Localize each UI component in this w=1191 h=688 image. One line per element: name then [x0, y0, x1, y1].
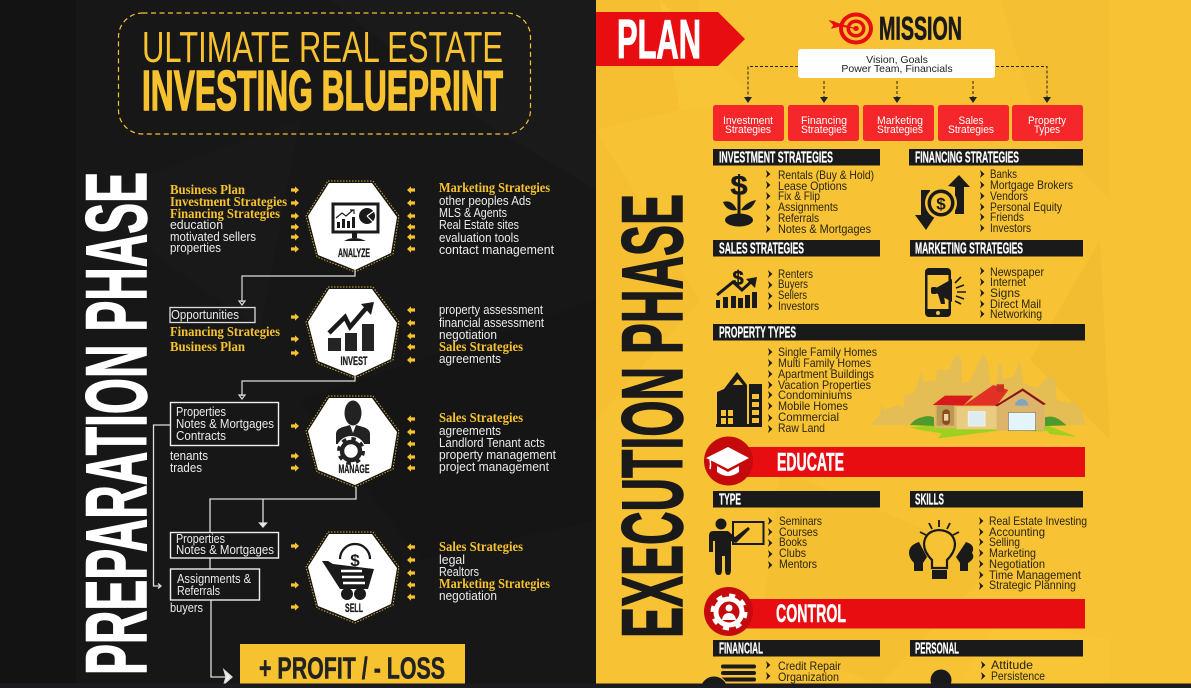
control banner — [704, 587, 1085, 636]
invest inputs left: Financing Strategies — [170, 324, 280, 339]
sell inputs left: buyers — [170, 600, 203, 615]
strategy buttons: Strategies — [877, 124, 923, 136]
panel: marketing strategies — [910, 240, 1083, 321]
sell inputs right: negotiation — [439, 588, 497, 603]
analyze inputs left: education — [170, 217, 223, 232]
panel: financing strategies: Vendors — [990, 189, 1028, 203]
panel: investment strategies: Lease Options — [778, 179, 847, 193]
sell inputs right: Realtors — [439, 564, 479, 579]
strategy buttons: Types — [1034, 124, 1060, 136]
panel: property types: Mobile Homes — [778, 399, 848, 413]
panel: preparation phase background — [0, 0, 596, 688]
panel: marketing strategies: MARKETING STRATEGIES — [915, 240, 1023, 258]
strategy buttons: Sales — [958, 115, 984, 127]
analyze inputs right: other peoples Ads — [439, 193, 531, 208]
icon: analyze badge: ANALYZE — [338, 248, 370, 260]
panel: type: Books — [779, 535, 807, 549]
panel: financing strategies: Banks — [990, 167, 1017, 181]
sell inputs right: Sales Strategies — [439, 539, 523, 554]
analyze inputs left: motivated sellers — [170, 229, 256, 244]
sell inputs right — [407, 539, 550, 603]
control banner: CONTROL — [776, 600, 846, 628]
panel: skills: SKILLS — [915, 492, 944, 508]
panel: type: Courses — [779, 525, 818, 539]
panel: investment strategies — [713, 149, 880, 236]
analyze inputs left: Business Plan — [170, 182, 245, 197]
panel: sales strategies: Renters — [778, 267, 813, 281]
icon: invest badge: INVEST — [340, 356, 368, 368]
title — [118, 13, 530, 134]
manage inputs right — [407, 410, 556, 474]
invest inputs right: agreements — [439, 351, 501, 366]
profit / loss callout — [240, 644, 465, 686]
panel: sales strategies: Buyers — [778, 277, 808, 291]
educate banner: EDUCATE — [777, 448, 844, 476]
panel: property types: Apartment Buildings — [778, 367, 874, 381]
panel: financial — [700, 640, 880, 688]
arrows: mission to strategies — [744, 66, 1051, 103]
strategy buttons: Property — [1028, 115, 1066, 127]
manage inputs left: Properties — [176, 404, 226, 419]
panel: marketing strategies: Signs — [990, 286, 1020, 300]
panel: marketing strategies: Direct Mail — [990, 297, 1041, 311]
icon: sell badge: $ — [350, 551, 360, 570]
analyze inputs right: Real Estate sites — [439, 217, 519, 232]
panel: personal: Persistence — [991, 669, 1045, 683]
invest inputs left: Business Plan — [170, 339, 245, 354]
plan ribbon: PLAN — [617, 8, 701, 70]
icon: invest badge — [306, 287, 399, 378]
educate banner — [704, 436, 1085, 486]
panel: sales strategies: Investors — [778, 299, 819, 313]
strategy buttons: Strategies — [725, 124, 771, 136]
mission box: Vision, Goals — [866, 54, 928, 66]
icon: sell badge — [306, 532, 399, 623]
panel: marketing strategies: Networking — [990, 307, 1042, 321]
manage inputs left: Notes & Mortgages — [176, 416, 274, 431]
strategy buttons: Financing — [801, 115, 847, 127]
manage inputs right: project management — [439, 459, 549, 474]
panel: investment strategies: Notes & Mortgages — [778, 222, 871, 236]
manage inputs right: Sales Strategies — [439, 410, 523, 425]
profit / loss callout: + PROFIT / - LOSS — [259, 650, 445, 686]
panel: sales strategies: Sellers — [778, 288, 807, 302]
illustration: house and skyline — [870, 353, 1085, 438]
mission box — [798, 49, 995, 78]
invest inputs right: property assessment — [439, 302, 543, 317]
panel: sales strategies: $ — [732, 268, 744, 290]
strategy buttons: Strategies — [801, 124, 847, 136]
panel: property types: Condominiums — [778, 388, 852, 402]
strategy buttons: Strategies — [948, 124, 994, 136]
analyze inputs right: MLS & Agents — [439, 205, 507, 220]
panel: skills: Marketing — [989, 546, 1036, 560]
analyze inputs left: Financing Strategies — [170, 206, 280, 221]
panel: skills: Strategic Planning — [989, 578, 1076, 592]
invest inputs left: Opportunities — [171, 307, 239, 322]
icon: analyze badge — [306, 181, 399, 272]
panel: personal — [910, 640, 1083, 688]
panel: type: TYPE — [719, 492, 741, 508]
strategy buttons: Marketing — [877, 115, 923, 127]
panel: property types: Commercial — [778, 410, 839, 424]
arrows: manage to sell — [154, 425, 356, 684]
panel: skills: Real Estate Investing — [989, 514, 1087, 528]
mission box: Power Team, Financials — [841, 63, 953, 75]
manage inputs right: agreements — [439, 423, 501, 438]
invest inputs right — [407, 302, 544, 366]
panel: type — [709, 491, 880, 575]
panel: financial: FINANCIAL — [719, 640, 763, 658]
panel: skills — [909, 491, 1087, 592]
panel: type: Seminars — [779, 514, 822, 528]
panel: sales strategies: SALES STRATEGIES — [719, 240, 804, 258]
analyze inputs right — [407, 180, 554, 257]
panel: property types: Multi Family Homes — [778, 356, 871, 370]
icon: mission target — [830, 12, 873, 44]
sell inputs left — [170, 531, 299, 615]
icon: manage badge: MANAGE — [338, 464, 370, 476]
panel: financing strategies: Mortgage Brokers — [990, 178, 1073, 192]
manage inputs left: trades — [170, 460, 202, 475]
panel: property types: PROPERTY TYPES — [719, 324, 796, 342]
panel: investment strategies: Fix & Flip — [778, 189, 820, 203]
manage inputs right: Landlord Tenant acts — [439, 435, 545, 450]
panel: financial: Organization — [778, 670, 839, 684]
invest inputs right: negotiation — [439, 327, 497, 342]
panel: execution phase background — [596, 0, 1191, 688]
sell inputs left: Assignments & — [177, 571, 251, 586]
panel: type: Mentors — [779, 557, 817, 571]
panel: investment strategies: Referrals — [778, 211, 819, 225]
panel: skills: Selling — [989, 535, 1020, 549]
panel: skills: Time Management — [989, 568, 1082, 582]
panel: investment strategies: Assignments — [778, 200, 838, 214]
sell inputs left: Notes & Mortgages — [176, 542, 274, 557]
panel: property types: Vacation Properties — [778, 378, 871, 392]
icon: sell badge: SELL — [345, 603, 363, 615]
mission heading: MISSION — [879, 10, 962, 46]
panel: marketing strategies: Newspaper — [990, 265, 1044, 279]
panel: financing strategies: FINANCING STRATEGIES — [915, 150, 1019, 166]
manage inputs right: property management — [439, 447, 556, 462]
panel: skills: Accounting — [989, 525, 1045, 539]
panel: financing strategies: $ — [936, 194, 946, 214]
sell inputs right: Marketing Strategies — [439, 576, 550, 591]
icon: manage badge — [306, 396, 399, 487]
panel: skills: Negotiation — [989, 557, 1045, 571]
analyze inputs left: Investment Strategies — [170, 194, 287, 209]
panel: financing strategies — [909, 149, 1083, 235]
invest inputs right: financial assessment — [439, 315, 544, 330]
strategy buttons: Investment — [723, 115, 773, 127]
panel: property types: Single Family Homes — [778, 345, 877, 359]
invest inputs right: Sales Strategies — [439, 339, 523, 354]
panel: financing strategies: Friends — [990, 210, 1024, 224]
title: ULTIMATE REAL ESTATE — [142, 23, 503, 72]
panel: financing strategies: Investors — [990, 221, 1031, 235]
arrow: analyze to invest — [239, 270, 355, 305]
panel: financing strategies: Personal Equity — [990, 200, 1062, 214]
panel: type: Clubs — [779, 546, 806, 560]
arrow: invest to manage — [239, 376, 355, 399]
strategy buttons — [713, 105, 1083, 141]
panel: property types — [713, 324, 1085, 435]
sell inputs right: legal — [439, 552, 465, 567]
panel: property types: Raw Land — [778, 421, 825, 435]
manage inputs left — [170, 402, 299, 475]
panel: investment strategies: Rentals (Buy & Hold) — [778, 168, 874, 182]
panel: investment strategies: INVESTMENT STRATEGIES — [719, 150, 833, 166]
analyze inputs left — [170, 182, 299, 255]
panel: investment strategies: $ — [730, 170, 748, 201]
manage inputs left: Contracts — [176, 428, 226, 443]
sell inputs left: Properties — [176, 531, 225, 546]
sell inputs left: Referrals — [177, 583, 220, 598]
panel: financial: Credit Repair — [778, 659, 841, 673]
title: INVESTING BLUEPRINT — [142, 59, 503, 123]
analyze inputs right: Marketing Strategies — [439, 180, 550, 195]
panel: personal: Attitude — [991, 658, 1033, 672]
analyze inputs left: properties — [170, 240, 221, 255]
panel: sales strategies — [713, 240, 880, 313]
analyze inputs right: contact management — [439, 242, 554, 257]
invest inputs left — [170, 307, 299, 357]
panel: personal: PERSONAL — [915, 640, 959, 658]
panel: marketing strategies: Internet — [990, 275, 1027, 289]
manage inputs left: tenants — [170, 448, 208, 463]
analyze inputs right: evaluation tools — [439, 230, 519, 245]
